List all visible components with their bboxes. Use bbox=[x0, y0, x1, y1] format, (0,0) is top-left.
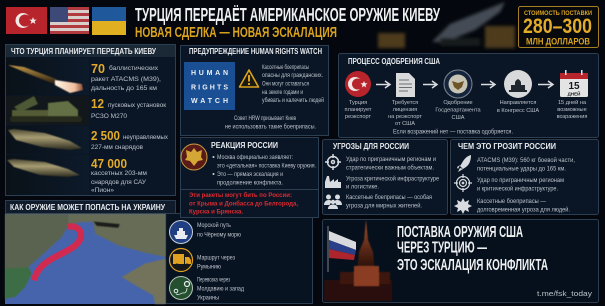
warning text bbox=[262, 64, 324, 104]
route 2: Romania bbox=[170, 248, 235, 272]
icon: factory bbox=[325, 176, 341, 188]
item: 70 missiles: ракет ATACMS (M39), bbox=[91, 76, 161, 83]
source link: t.me/fsk_today bbox=[537, 289, 592, 298]
threat 3 text bbox=[346, 194, 432, 210]
step 5: 15 days: ДНЕЙ bbox=[568, 90, 580, 96]
routes heading bbox=[6, 200, 176, 214]
step 1: Turkey: Турция bbox=[349, 100, 367, 106]
step 4: Congress: в Конгресс США bbox=[497, 108, 539, 114]
subtitle: НОВАЯ СДЕЛКА — НОВАЯ ЭСКАЛАЦИЯ bbox=[135, 25, 337, 41]
step 5: 15 days: возможные bbox=[557, 107, 587, 113]
reaction bullets bbox=[212, 154, 316, 186]
route 1: sea: по Чёрному морю bbox=[197, 232, 241, 238]
item: 70 missiles: дальность до 165 км bbox=[91, 85, 157, 92]
red warning text: Эти ракеты могут бить по России: bbox=[189, 191, 292, 199]
red warning text bbox=[181, 190, 318, 216]
item: 47000 shells: 47 000 bbox=[91, 156, 127, 171]
consequence 2 text bbox=[477, 177, 564, 192]
cost unit: МЛН ДОЛЛАРОВ bbox=[526, 36, 590, 46]
cost value: 280–300 bbox=[523, 15, 592, 38]
panel: weapons list bbox=[6, 44, 176, 196]
step 2: licence bbox=[388, 73, 422, 127]
arrow bbox=[423, 81, 437, 88]
route 2: Romania: Маршрут через bbox=[197, 254, 235, 262]
item: 12 launchers: пусковых установок bbox=[108, 102, 166, 109]
arrow bbox=[376, 81, 390, 88]
process heading: ПРОЦЕСС ОДОБРЕНИЯ США bbox=[348, 57, 440, 66]
image: ATACMS rocket bbox=[6, 58, 89, 95]
step 5: 15 days: возражения bbox=[557, 114, 587, 120]
panel: Russia's reaction bbox=[180, 138, 318, 218]
routes heading: КАК ОРУЖИЕ МОЖЕТ ПОПАСТЬ НА УКРАИНУ bbox=[10, 203, 166, 212]
warning text: Они могут оставаться bbox=[262, 80, 309, 88]
weapons heading: ЧТО ТУРЦИЯ ПЛАНИРУЕТ ПЕРЕДАТЬ КИЕВУ bbox=[11, 47, 157, 56]
item: 70 missiles bbox=[91, 61, 161, 92]
consequence 3 text: долговременная угроза для людей. bbox=[477, 206, 570, 214]
image: Kremlin tower and Russian flag bbox=[324, 220, 392, 301]
step 3: State Department: Госдепартамента bbox=[435, 108, 482, 114]
route 3: Moldova: Перевозка через bbox=[197, 276, 230, 284]
panel: Human Rights Watch warning bbox=[180, 46, 328, 136]
step 1: Turkey: реэкспорт bbox=[345, 114, 371, 120]
item: 12 launchers bbox=[91, 96, 166, 120]
item: 2500 rockets bbox=[91, 128, 169, 151]
step 1: Turkey: планирует bbox=[345, 107, 372, 113]
item: 70 missiles: баллистических bbox=[109, 65, 159, 72]
image: M270 launcher bbox=[6, 96, 89, 125]
flag: USA bbox=[50, 7, 89, 34]
item: 47000 shells: кассетных 203-мм bbox=[91, 170, 147, 177]
threat 3 text: Кассетные боеприпасы — особая bbox=[346, 194, 432, 201]
conclusion text: ЧЕРЕЗ ТУРЦИЮ — bbox=[397, 240, 487, 256]
reaction bullets: это «детальная» поставка Киеву оружия. bbox=[217, 162, 316, 170]
item: 2500 rockets: неуправляемых bbox=[123, 134, 169, 141]
consequence 1 text: потенциальные удары до 165 км. bbox=[477, 166, 566, 172]
step 2: licence: на реэкспорт bbox=[388, 114, 422, 120]
header flags bbox=[6, 7, 126, 35]
item: 2500 rockets: 2 500 bbox=[91, 128, 120, 143]
conclusion text bbox=[397, 224, 548, 274]
warning text: убивать и калечить людей bbox=[262, 97, 324, 104]
HRW logo bbox=[184, 62, 235, 110]
threat 2 text: Угроза критической инфраструктуре bbox=[346, 176, 439, 182]
step 5: 15 days bbox=[557, 70, 588, 120]
reaction heading: РЕАКЦИЯ РОССИИ bbox=[211, 141, 278, 150]
step 2: licence: от США bbox=[395, 121, 415, 127]
route 3: Moldova: Украины bbox=[197, 294, 219, 302]
panel: threats to Russia bbox=[322, 140, 448, 214]
flag: Turkey bbox=[6, 7, 47, 34]
icon: people bbox=[324, 194, 342, 209]
HRW advice: Совет HRW призывает Киев bbox=[234, 115, 297, 122]
threat 1 text bbox=[346, 156, 436, 172]
threat 1 text: Удар по приграничным регионам и bbox=[346, 156, 436, 163]
HRW advice bbox=[225, 115, 316, 130]
threat 2 text bbox=[346, 176, 439, 190]
red warning text: от Крыма и Донбасса до Белгорода, bbox=[189, 200, 298, 208]
HRW logo: WATCH bbox=[191, 98, 228, 105]
title: ТУРЦИЯ ПЕРЕДАЁТ АМЕРИКАНСКОЕ ОРУЖИЕ КИЕВУ bbox=[135, 5, 441, 25]
item: 47000 shells: снарядов для САУ bbox=[91, 179, 146, 186]
warning text: на земле годами и bbox=[262, 89, 303, 96]
consequence 2 text: Удар по приграничным регионам bbox=[477, 177, 564, 184]
map of the Black Sea route bbox=[5, 214, 166, 304]
step 2: licence: лицензия bbox=[393, 107, 417, 113]
reaction bullets: Это — прямая эскалация и bbox=[217, 171, 283, 178]
panel: conclusion bbox=[322, 220, 598, 302]
threat 3 text: угроза для мирных жителей. bbox=[346, 202, 422, 210]
step 5: 15 days: 15 дней на bbox=[558, 99, 587, 106]
item: 2500 rockets: 227-мм снарядов bbox=[91, 144, 144, 151]
cost box bbox=[518, 6, 598, 48]
image: 203 mm shell bbox=[6, 155, 89, 195]
panel: consequences for Russia bbox=[450, 140, 598, 214]
item: 70 missiles: 70 bbox=[91, 61, 105, 76]
step 4: Congress bbox=[497, 70, 539, 114]
HRW logo: RIGHTS bbox=[191, 84, 228, 92]
item: 47000 shells: «Пион» bbox=[91, 187, 115, 194]
item: 47000 shells bbox=[91, 156, 147, 194]
cost label: СТОИМОСТЬ ПОСТАВКИ bbox=[524, 10, 592, 17]
consequence 3 text bbox=[477, 198, 570, 214]
icon: target bbox=[325, 154, 341, 170]
route 1: sea: Морской путь bbox=[197, 222, 231, 229]
icon: Russian coat of arms bbox=[181, 144, 207, 170]
route 3: Moldova bbox=[170, 276, 244, 302]
conclusion text: ПОСТАВКА ОРУЖИЯ США bbox=[397, 224, 523, 241]
reaction bullets: Москва официально заявляет: bbox=[217, 154, 293, 161]
item: 12 launchers: 12 bbox=[91, 96, 104, 111]
step 3: State Department: Одобрение bbox=[443, 100, 473, 106]
step 2: licence: Требуется bbox=[392, 100, 418, 106]
image: 227 mm rocket bbox=[6, 126, 89, 154]
warning text: опасны для гражданских. bbox=[262, 72, 323, 79]
icon: warning triangle bbox=[240, 70, 258, 87]
header photo: aircraft and cargo bbox=[378, 2, 515, 48]
HRW heading: ПРЕДУПРЕЖДЕНИЕ HUMAN RIGHTS WATCH bbox=[189, 47, 322, 56]
route 3: Moldova: Молдавию и запад bbox=[197, 286, 244, 292]
step 3: State Department bbox=[435, 70, 482, 121]
icon: crosshair bbox=[454, 174, 472, 192]
panel: delivery routes bbox=[5, 200, 312, 304]
route 1: sea bbox=[170, 220, 241, 244]
process note: Если возражений нет — поставка одобряется. bbox=[393, 128, 513, 136]
consequence 2 text: и критической инфраструктуре. bbox=[477, 186, 558, 192]
step 3: State Department: США bbox=[452, 115, 465, 121]
HRW logo: HUMAN bbox=[191, 70, 228, 77]
warning text: Кассетные боеприпасы bbox=[262, 64, 309, 71]
arrow bbox=[538, 81, 553, 88]
weapons heading bbox=[6, 45, 175, 57]
icon: rocket bbox=[457, 155, 471, 172]
threat 2 text: и логистике. bbox=[346, 184, 379, 190]
consequences heading: ЧЕМ ЭТО ГРОЗИТ РОССИИ bbox=[458, 142, 556, 151]
threat 1 text: стратегически важным объектам. bbox=[346, 164, 434, 172]
route 2: Romania: Румынию bbox=[197, 264, 221, 270]
consequence 1 text: ATACMS (M39): 560 кг боевой части, bbox=[477, 157, 575, 164]
panel: US approval process bbox=[338, 54, 598, 138]
consequence 3 text: Кассетные боеприпасы — bbox=[477, 198, 547, 205]
item: 12 launchers: РСЗО М270 bbox=[91, 113, 128, 120]
icon: cluster munitions bbox=[454, 198, 472, 214]
reaction bullets: продолжение конфликта. bbox=[217, 180, 283, 186]
threats heading: УГРОЗЫ ДЛЯ РОССИИ bbox=[333, 142, 409, 151]
consequence 1 text bbox=[477, 157, 575, 172]
flag: Ukraine bbox=[92, 7, 126, 35]
HRW advice: не использовать такие боеприпасы. bbox=[225, 124, 316, 130]
arrow bbox=[481, 81, 495, 88]
step 5: 15 days: 15 bbox=[568, 81, 580, 92]
step 1: Turkey bbox=[345, 71, 372, 120]
red warning text: Курска и Брянска. bbox=[189, 208, 243, 216]
step 4: Congress: Направляется bbox=[500, 100, 536, 106]
